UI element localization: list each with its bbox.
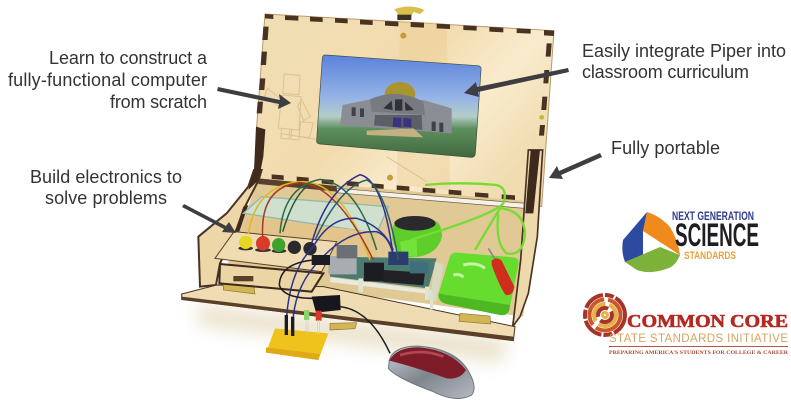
- callout: integrate into curriculum: Easily integrate Piper into: [582, 41, 786, 61]
- logo: Next Generation Science Standards: [622, 209, 759, 272]
- table shadow: [195, 305, 510, 362]
- hinges: [223, 283, 491, 330]
- callout: build electronics: Build electronics to: [30, 167, 182, 187]
- callout: fully portable: Fully portable: [611, 138, 720, 158]
- bottom board: [182, 285, 515, 341]
- raspberry pi board: [328, 245, 444, 309]
- green speaker: [392, 216, 442, 257]
- callout: build electronics: [30, 167, 182, 208]
- logo wordmark: COMMON CORE: [627, 311, 788, 331]
- logo mark: spiral: [585, 295, 625, 335]
- callout: learn to construct: [8, 48, 208, 112]
- acrylic cover: [243, 197, 388, 233]
- green battery pack: [438, 253, 519, 315]
- logo: Next Generation Science Standards: STANDARDS: [684, 250, 736, 262]
- computer mouse: [388, 346, 474, 398]
- arrow to case side: [549, 153, 602, 179]
- logo: Common Core State Standards Initiative: STATE STANDARDS INITIATIVE: [609, 333, 788, 345]
- coloured buttons: [238, 236, 317, 255]
- right side panel: [513, 150, 543, 327]
- callout: build electronics: solve problems: [45, 188, 167, 208]
- callout text: construct a computer: Learn to construct a: [49, 48, 208, 68]
- logo mark: three colour ribbon: [622, 212, 680, 272]
- arrow to button panel: [182, 204, 236, 233]
- yellow breadboard: [266, 310, 328, 360]
- usb adapter: [312, 295, 341, 313]
- open wooden lid: [257, 6, 554, 207]
- lid finger-joint tabs: [257, 14, 554, 200]
- robot engraving: [265, 74, 427, 182]
- left hinge slot in lid: [248, 127, 265, 190]
- logo: Common Core State Standards Initiative: PREPARING AMERICA'S STUDENTS FOR COLLEGE & CAREER: [609, 350, 788, 356]
- arrow to laptop screen: [464, 68, 569, 97]
- callout: learn to construct: from scratch: [110, 92, 207, 112]
- button panel: [215, 232, 337, 272]
- green cable: [410, 183, 525, 254]
- case interior: [227, 178, 533, 317]
- callout: learn to construct: fully-functional computer: [8, 70, 207, 90]
- logo: Common Core State Standards Initiative: [585, 295, 788, 356]
- lid latch and hardware: [394, 6, 425, 19]
- logo wordmark: NEXT GENERATION: [672, 209, 754, 223]
- left side panel: [198, 170, 262, 287]
- open case base with electronics: [182, 127, 543, 398]
- arrow to robot engraving: [217, 87, 291, 109]
- callout: integrate into curriculum: [582, 41, 786, 82]
- product photo: Piper computer kit: [182, 6, 554, 398]
- jumper wires: [248, 175, 398, 353]
- laptop screen with game building: [317, 55, 481, 157]
- red screwdriver: [488, 248, 514, 295]
- callout: integrate into curriculum: classroom curriculum: [582, 62, 749, 82]
